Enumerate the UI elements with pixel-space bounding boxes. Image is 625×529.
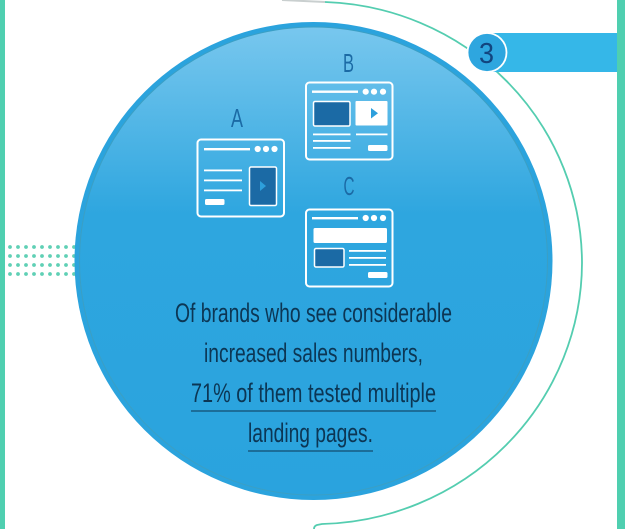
icon: wireframe B bbox=[306, 82, 392, 160]
label A: A bbox=[231, 103, 243, 133]
left border bbox=[0, 0, 5, 529]
statistic text: 71% of them tested multiple bbox=[191, 378, 436, 408]
step number badge: 3 bbox=[479, 38, 494, 70]
label B: B bbox=[343, 48, 354, 78]
arc: green outline bbox=[282, 0, 582, 529]
icon: wireframe C bbox=[306, 210, 392, 286]
statistic text: landing pages. bbox=[248, 418, 373, 448]
label C: C bbox=[344, 171, 354, 201]
dot grid bbox=[8, 245, 76, 276]
icon: wireframe A bbox=[198, 140, 284, 216]
statistic text: Of brands who see considerable bbox=[175, 298, 452, 328]
step number badge bbox=[468, 33, 506, 72]
statistic text: increased sales numbers, bbox=[204, 338, 423, 368]
step band bbox=[490, 33, 617, 72]
right border bbox=[617, 0, 625, 529]
statistic text bbox=[175, 298, 452, 452]
main circle bbox=[74, 22, 552, 500]
